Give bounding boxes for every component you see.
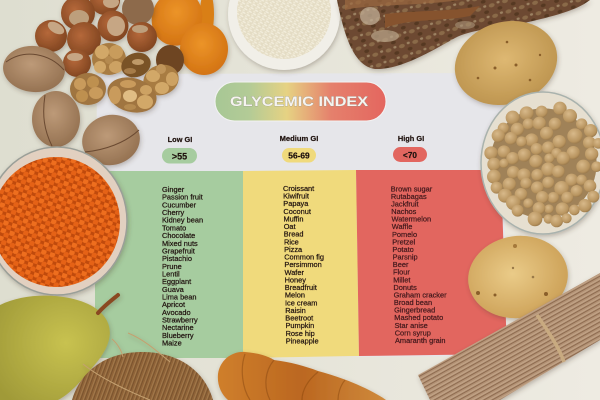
- low GI food list: Kidney bean: [162, 216, 203, 225]
- whole walnuts: [1, 43, 145, 170]
- high GI food list: Donuts: [393, 283, 417, 292]
- high GI food list: Broad bean: [394, 298, 432, 307]
- coconut: [72, 333, 213, 400]
- medium GI food list: Pineapple: [286, 336, 319, 345]
- medium GI food list: Coconut: [283, 207, 311, 216]
- low GI food list: Chocolate: [162, 231, 195, 240]
- low GI food list: Apricot: [162, 300, 185, 309]
- high GI heading and range: <70: [403, 151, 417, 160]
- high GI food list: Rutabagas: [391, 192, 427, 201]
- medium GI food list: Raisin: [285, 306, 306, 315]
- low GI heading and range: >55: [172, 151, 187, 161]
- medium GI food list: Wafer: [284, 268, 304, 277]
- medium GI pill: [282, 148, 316, 162]
- medium GI food list: Kiwifruit: [283, 192, 309, 201]
- medium GI food list: Muffin: [284, 214, 304, 224]
- chickpea bowl: [481, 92, 600, 234]
- high GI food list: Graham cracker: [394, 290, 447, 299]
- low GI food list: Tomato: [162, 223, 186, 232]
- low GI heading and range: [162, 135, 197, 164]
- high GI food list: [391, 184, 447, 345]
- low GI food list: Grapefruit: [162, 246, 195, 255]
- pear: [0, 295, 118, 400]
- high GI food list: Parsnip: [393, 252, 418, 262]
- low GI food list: Avocado: [162, 308, 191, 317]
- medium GI food list: Breadfruit: [285, 283, 317, 292]
- potato top right: [454, 21, 560, 110]
- rice bowl: [228, 0, 340, 70]
- low GI food list: Lentil: [162, 270, 180, 278]
- medium GI heading and range: 56-69: [288, 150, 310, 160]
- low GI food list: Lima bean: [162, 292, 197, 302]
- low GI food list: Mixed nuts: [162, 239, 198, 248]
- high GI heading and range: [393, 134, 427, 162]
- low GI food list: Nectarine: [162, 323, 194, 332]
- high GI food list: Corn syrup: [395, 328, 431, 337]
- medium GI heading and range: Medium GI: [280, 134, 318, 143]
- medium GI food list: Beetroot: [285, 314, 313, 322]
- rice: [237, 0, 331, 59]
- paper chart sheet: [95, 73, 507, 358]
- high GI food list: Watermelon: [392, 215, 431, 224]
- medium GI food list: Croissant: [283, 184, 314, 193]
- low GI food list: Cucumber: [162, 200, 197, 209]
- medium GI food list: Persimmon: [284, 260, 322, 269]
- high GI food list: Waffle: [392, 222, 412, 231]
- medium GI food list: Papaya: [283, 199, 309, 208]
- low GI food list: Pistachio: [162, 254, 192, 263]
- rye bread: [337, 0, 590, 69]
- high GI food list: Beer: [393, 260, 409, 269]
- low GI food list: [162, 185, 203, 348]
- medium GI food list: Melon: [285, 291, 305, 300]
- high GI food list: Amaranth grain: [395, 336, 446, 345]
- panel: low GI green column: [95, 171, 243, 358]
- medium GI food list: Common fig: [284, 253, 324, 262]
- red lentils: [0, 157, 120, 287]
- high GI food list: Pretzel: [392, 237, 416, 246]
- medium GI food list: Ice cream: [285, 298, 317, 307]
- low GI food list: Blueberry: [162, 331, 194, 340]
- low GI food list: Guava: [162, 285, 185, 294]
- medium GI food list: Pizza: [284, 245, 303, 254]
- medium GI food list: Oat: [284, 222, 296, 231]
- panel: medium GI yellow column: [243, 170, 359, 358]
- high GI food list: Mashed potato: [394, 313, 443, 322]
- high GI food list: Star anise: [394, 321, 428, 330]
- medium GI food list: Rice: [284, 237, 299, 246]
- high GI food list: Nachos: [391, 207, 417, 216]
- high GI food list: Brown sugar: [391, 184, 433, 193]
- panel: high GI red column: [356, 170, 507, 356]
- low GI food list: Passion fruit: [162, 193, 203, 202]
- low GI food list: Eggplant: [162, 277, 191, 286]
- high GI heading and range: High GI: [398, 134, 424, 143]
- low GI heading and range: Low GI: [168, 135, 192, 144]
- high GI food list: Jackfruit: [391, 200, 419, 208]
- noodle band: [537, 315, 564, 362]
- medium GI food list: Pumpkin: [286, 321, 314, 330]
- apricots: [144, 0, 228, 75]
- walnut halves: [70, 43, 184, 118]
- lentil bowl: [0, 147, 127, 295]
- high GI food list: Gingerbread: [394, 306, 435, 315]
- low GI food list: Strawberry: [162, 316, 198, 325]
- hazelnuts: [35, 0, 157, 77]
- low GI food list: Cherry: [162, 208, 184, 217]
- medium GI food list: Rose hip: [286, 329, 315, 338]
- chickpeas: [484, 102, 600, 227]
- low GI food list: Maize: [162, 339, 182, 348]
- high GI food list: Flour: [393, 268, 410, 277]
- high GI pill: [393, 147, 427, 162]
- title text: GLYCEMIC INDEX: [230, 93, 369, 109]
- pear stem: [98, 295, 118, 313]
- high GI food list: Potato: [392, 245, 414, 254]
- medium GI food list: Bread: [284, 230, 304, 239]
- medium GI food list: [283, 184, 324, 345]
- potato lower right: [467, 235, 572, 322]
- bundle of soba noodles: [418, 273, 600, 400]
- croissant: [218, 352, 386, 400]
- medium GI heading and range: [280, 134, 318, 162]
- title pill: [215, 82, 386, 121]
- low GI pill: [162, 148, 197, 164]
- low GI food list: Prune: [162, 262, 182, 271]
- high GI food list: Pomelo: [392, 230, 417, 239]
- medium GI food list: Honey: [285, 275, 306, 284]
- high GI food list: Millet: [393, 275, 410, 284]
- low GI food list: Ginger: [162, 185, 185, 194]
